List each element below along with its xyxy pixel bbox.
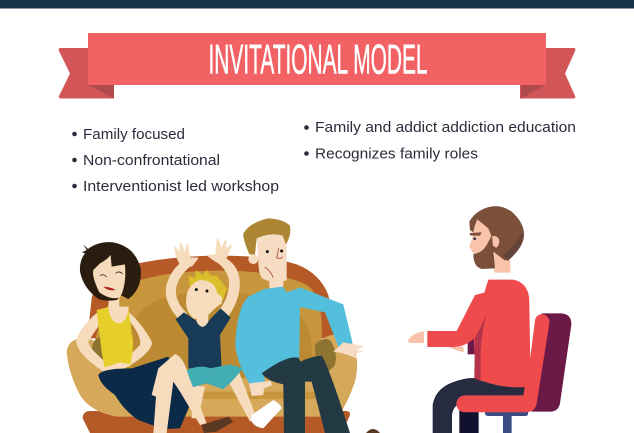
eye (473, 237, 476, 240)
chair seat plate (485, 412, 528, 416)
arm (427, 292, 489, 347)
hand (408, 332, 424, 343)
mother: neck and chest (108, 295, 129, 326)
chair stem (503, 413, 512, 433)
neck (494, 252, 510, 273)
mother: dress top (97, 307, 133, 370)
ribbon left tail (58, 48, 114, 98)
child: neck (197, 315, 208, 328)
ribbon right tail (520, 48, 576, 98)
ribbon right fold (521, 85, 546, 98)
father: ear (248, 254, 258, 264)
mother: mouth (103, 287, 116, 290)
illustration: family on sofa (67, 218, 364, 433)
title ribbon (58, 33, 576, 98)
top navy bar (0, 0, 634, 8)
right bullet list (304, 119, 576, 162)
father: eyes (266, 250, 269, 253)
mother: face (93, 255, 125, 298)
far leg (459, 408, 479, 433)
sofa right arm shade (315, 339, 336, 377)
child: arms (167, 239, 239, 320)
bullet: family focused: Family focused (83, 126, 185, 143)
mother: leg (152, 354, 207, 433)
child: shorts (187, 364, 243, 389)
sofa back (87, 256, 338, 338)
child: shirt (176, 308, 231, 368)
father: left hand (249, 381, 272, 396)
father: sweater (235, 287, 353, 385)
sofa base (83, 411, 350, 433)
sofa base front (123, 418, 343, 429)
bullet: interventionist led workshop: Interventionist led workshop (83, 178, 279, 195)
child: white shoe (251, 400, 282, 428)
chair arm and seat (456, 314, 549, 412)
child: eyes (195, 288, 198, 291)
chair back (532, 313, 571, 412)
bullet: recognizes family roles: Recognizes family roles (315, 146, 478, 162)
bullet: non-confrontational: Non-confrontational (83, 152, 220, 169)
father: right hand (333, 342, 364, 358)
child: left hand (175, 243, 197, 267)
near leg (433, 378, 527, 433)
hair shade (503, 230, 524, 261)
child: hair (188, 270, 227, 300)
child: head (186, 280, 222, 319)
ribbon main band (88, 33, 546, 85)
mother: arms (76, 312, 152, 372)
far hand (447, 347, 464, 352)
chair far panel (468, 338, 476, 354)
child: right hand (208, 239, 231, 262)
mother: closed eyes (100, 272, 123, 277)
father: jeans (262, 356, 350, 433)
sofa inner back (95, 271, 322, 372)
torso shade (474, 305, 489, 381)
father: neck (269, 275, 283, 292)
mother: skirt (98, 357, 190, 429)
father: face (257, 235, 287, 282)
hair (469, 206, 524, 261)
eyebrow (470, 232, 482, 236)
father: nose and mouth (265, 248, 283, 278)
sofa seat and arms (67, 335, 357, 417)
floor object: brown shoe tip (366, 429, 380, 433)
left bullet list (72, 126, 279, 195)
sofa seat crease (187, 392, 317, 399)
face (469, 219, 493, 253)
torso (473, 280, 531, 387)
sofa left arm shade (92, 337, 105, 365)
mother: hands (102, 362, 132, 373)
child: legs (192, 385, 205, 418)
ear (492, 236, 499, 248)
mother: brown shoe (201, 417, 233, 433)
sofa inner shade (127, 292, 312, 378)
father: hair (243, 218, 290, 254)
mother: hair (80, 242, 141, 301)
bullet: family and addict addiction education: Family and addict addiction education (315, 119, 576, 136)
ribbon left fold (88, 85, 114, 98)
illustration: counselor in chair (408, 206, 571, 433)
beard (473, 235, 495, 269)
